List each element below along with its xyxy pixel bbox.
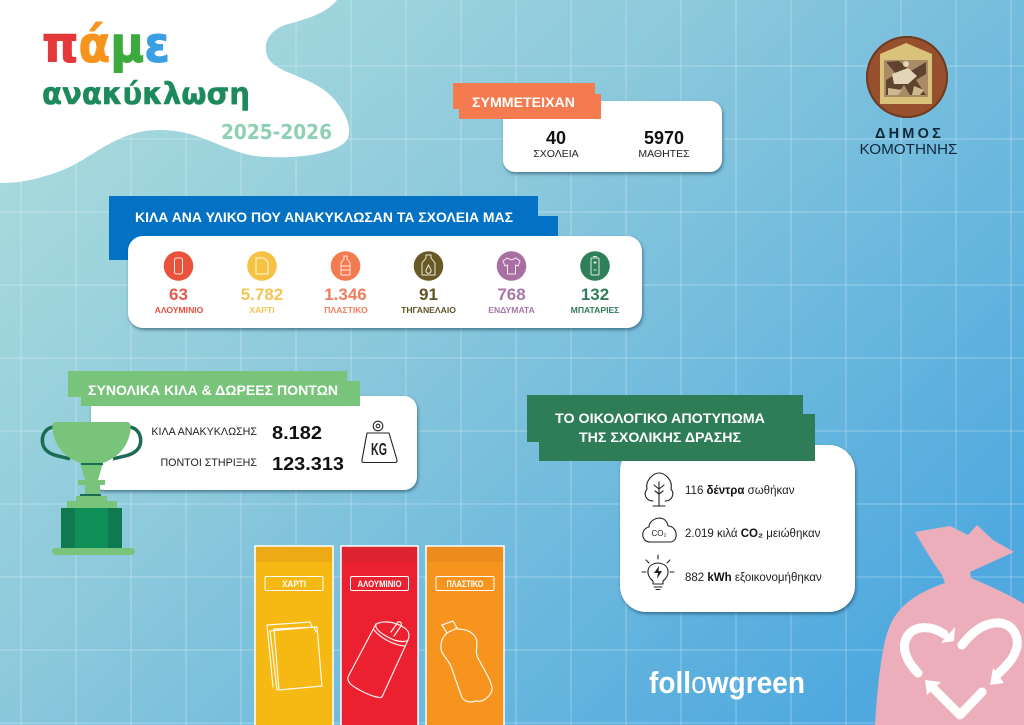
heading: kilos per material	[109, 196, 558, 260]
logo text	[860, 126, 958, 158]
material: cooking oil: ΤΗΓΑΝΕΛΑΙΟ	[401, 305, 456, 315]
material: aluminium: 63	[169, 285, 188, 304]
title: ανακύκλωση: ανακύκλωση	[42, 77, 250, 112]
material: cooking oil: 91	[419, 285, 438, 304]
icon: weight	[362, 421, 397, 462]
panel: kilos per material	[109, 196, 642, 328]
material: batteries: ΜΠΑΤΑΡΙΕΣ	[571, 305, 619, 315]
stat: students: ΜΑΘΗΤΕΣ	[638, 148, 690, 160]
row: trees saved	[645, 473, 795, 506]
bin: paper	[255, 546, 333, 725]
stat: schools	[533, 128, 579, 160]
icon: recycling heart	[904, 623, 1017, 715]
material: aluminium	[155, 251, 204, 315]
row: recycling kilos: ΚΙΛΑ ΑΝΑΚΥΚΛΩΣΗΣ	[151, 426, 257, 438]
stat: students	[638, 128, 690, 160]
icon: paper sheets	[267, 622, 322, 690]
material: aluminium: ΑΛΟΥΜΙΝΙΟ	[155, 305, 204, 315]
material: paper	[241, 251, 283, 315]
bin label: aluminium: ΑΛΟΥΜΙΝΙΟ	[358, 579, 402, 590]
material: batteries	[571, 251, 619, 315]
bin label: plastic: ΠΛΑΣΤΙΚΟ	[446, 579, 484, 590]
heading: kilos per material: ΚΙΛΑ ΑΝΑ ΥΛΙΚΟ ΠΟΥ ΑΝΑΚΥΚΛΩΣΑΝ ΤΑ ΣΧΟΛΕΙΑ ΜΑΣ	[135, 210, 513, 225]
white title blob	[0, 0, 349, 183]
heading: totals: ΣΥΝΟΛΙΚΑ ΚΙΛΑ & ΔΩΡΕΕΣ ΠΟΝΤΩΝ	[88, 382, 338, 398]
icon: pink recycling bag	[875, 525, 1024, 725]
row: CO2 reduced	[643, 518, 821, 542]
material: plastic: 1.346	[324, 285, 367, 304]
row: recycling kilos	[151, 422, 322, 443]
material: plastic	[324, 251, 368, 315]
material: paper: ΧΑΡΤΙ	[249, 305, 275, 315]
row: CO2 reduced: 2.019 κιλά CO₂ μειώθηκαν	[685, 528, 821, 540]
material: cooking oil	[401, 251, 456, 315]
title: πάμε: πάμε	[42, 16, 170, 74]
bin label: paper	[265, 576, 323, 590]
material: batteries: 132	[581, 285, 609, 304]
icon: weight: KG	[371, 439, 387, 459]
panel: ecological footprint	[527, 395, 855, 612]
icon: can	[348, 622, 409, 697]
logo: followgreen: followgreen	[649, 665, 805, 700]
title: years: 2025-2026	[221, 120, 332, 144]
heading: totals	[68, 371, 360, 406]
heading: ecological footprint: ΤΟ ΟΙΚΟΛΟΓΙΚΟ ΑΠΟΤΥΠΩΜΑ	[555, 411, 765, 426]
row: trees saved: 116 δέντρα σωθήκαν	[685, 485, 795, 497]
logo text: ΔΗΜΟΣ	[875, 126, 944, 142]
stat: students: 5970	[644, 128, 684, 148]
row: energy saved	[642, 555, 822, 590]
material: plastic: ΠΛΑΣΤΙΚΟ	[324, 305, 368, 315]
stat: schools: ΣΧΟΛΕΙΑ	[533, 148, 579, 160]
heading: ecological footprint	[527, 395, 815, 461]
panel: participants card	[453, 83, 722, 172]
material: clothes: ΕΝΔΥΜΑΤΑ	[488, 305, 535, 315]
material: clothes	[488, 251, 535, 315]
stat: schools: 40	[546, 128, 566, 148]
heading: ecological footprint: ΤΗΣ ΣΧΟΛΙΚΗΣ ΔΡΑΣΗΣ	[579, 430, 741, 445]
heading: participants	[453, 83, 601, 119]
icon: bottle	[441, 621, 492, 702]
logo: municipality of Komotini	[860, 36, 958, 158]
bin label: plastic	[436, 576, 494, 590]
title	[42, 16, 332, 144]
row: support points: ΠΟΝΤΟΙ ΣΤΗΡΙΞΗΣ	[160, 457, 257, 469]
logo text: ΚΟΜΟΤΗΝΗΣ	[860, 142, 958, 158]
panel: totals	[68, 371, 417, 490]
material: clothes: 768	[497, 285, 526, 304]
bin: aluminium	[341, 546, 418, 725]
row: recycling kilos: 8.182	[272, 422, 322, 443]
material: paper: 5.782	[241, 285, 283, 304]
icon: trophy	[42, 422, 141, 555]
row: energy saved: 882 kWh εξοικονομήθηκαν	[685, 572, 822, 584]
bin label: paper: ΧΑΡΤΙ	[282, 579, 306, 590]
row: support points: 123.313	[272, 453, 344, 474]
bin label: aluminium	[350, 576, 408, 590]
row: CO2 reduced: CO₂	[651, 529, 667, 538]
heading: participants: ΣΥΜΜΕΤΕΙΧΑΝ	[472, 94, 575, 110]
row: support points	[160, 453, 344, 474]
bin: plastic	[426, 546, 504, 725]
